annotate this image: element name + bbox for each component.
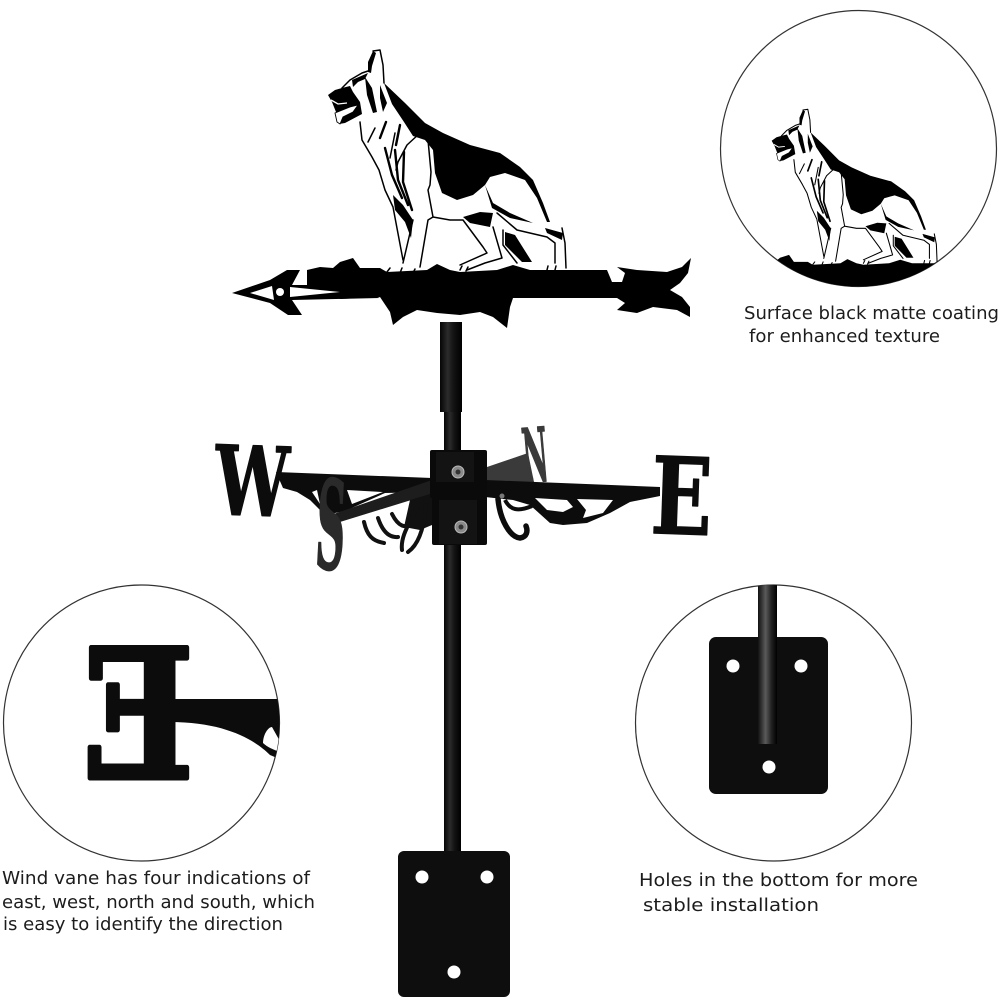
E arm	[485, 435, 714, 561]
N arm	[487, 412, 552, 502]
caption: matte coating: for enhanced texture	[749, 326, 940, 347]
callout: matte coating	[720, 10, 1000, 347]
vane: dog and arrow	[232, 50, 691, 328]
ground bar with tail	[307, 258, 691, 328]
tongue and lip	[335, 105, 358, 124]
detail letter E and arm: E	[82, 610, 194, 821]
pole	[440, 322, 462, 851]
black saddle and markings	[328, 51, 563, 262]
caption: matte coating	[744, 303, 999, 347]
detail plate and pole	[709, 585, 828, 794]
detail letter E and arm	[88, 645, 280, 780]
W arm: W	[212, 426, 293, 540]
caption: mounting holes: stable installation	[643, 895, 819, 916]
central bracket	[430, 450, 487, 545]
callout: mounting holes	[636, 585, 918, 916]
S arm	[312, 453, 434, 599]
dog figure on ground bar	[307, 50, 691, 328]
detail circle outline	[720, 10, 996, 286]
detail circle outline	[636, 585, 912, 861]
arrow head	[232, 270, 380, 315]
S arm: S	[312, 453, 349, 599]
caption: matte coating: Surface black matte coating	[744, 303, 999, 324]
detail dog clipped to circle	[772, 108, 938, 286]
caption: direction letter: east, west, north and south, which	[2, 892, 315, 913]
callout: direction letter	[2, 585, 315, 935]
caption: mounting holes	[639, 870, 918, 916]
E arm: E	[649, 435, 714, 561]
dog outlines and fur lines	[342, 50, 566, 273]
bracket bolts	[452, 466, 467, 533]
compass direction arms	[212, 412, 714, 599]
caption: direction letter	[2, 868, 315, 935]
mounting base plate	[398, 851, 510, 997]
caption: mounting holes: Holes in the bottom for more	[639, 870, 918, 891]
N arm: N	[519, 412, 552, 502]
caption: direction letter: is easy to identify the direction	[3, 914, 283, 935]
W arm	[212, 426, 432, 540]
caption: direction letter: Wind vane has four indications of	[2, 868, 311, 889]
detail circle outline	[4, 585, 280, 861]
